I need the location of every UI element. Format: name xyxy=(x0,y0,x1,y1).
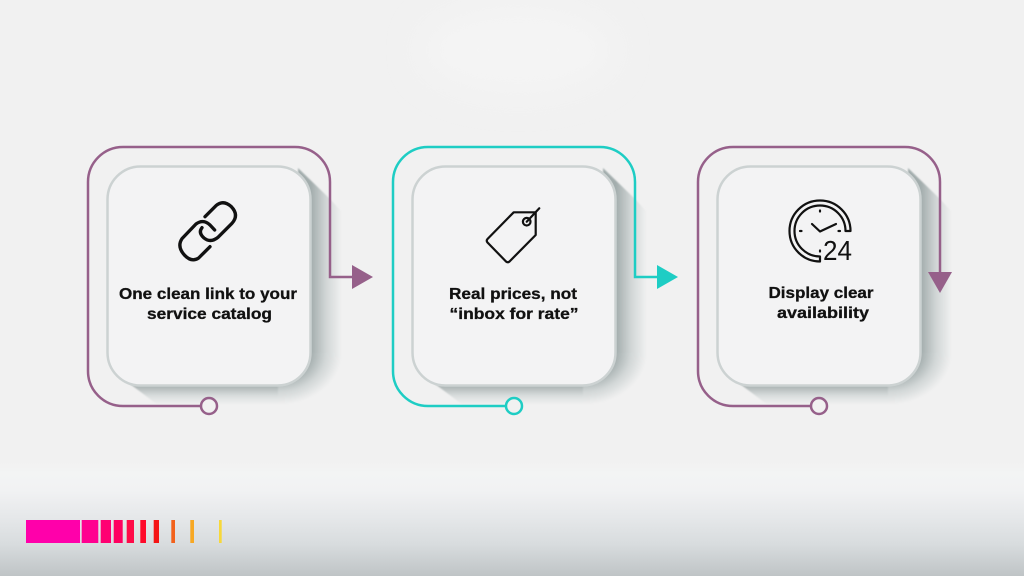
heading xyxy=(768,285,874,322)
arrow head xyxy=(352,265,373,289)
icon: 24 hour clock xyxy=(789,200,852,266)
faint top glow xyxy=(422,6,614,94)
heading xyxy=(449,286,578,323)
connector line xyxy=(393,147,659,406)
card shadow xyxy=(435,168,647,405)
panel: real prices xyxy=(393,147,678,414)
heading: Display clear xyxy=(768,285,874,302)
heading: availability xyxy=(777,305,869,322)
heading xyxy=(119,286,297,323)
bottom floor gradient xyxy=(0,462,1024,576)
ring node xyxy=(811,398,827,414)
heading: service catalog xyxy=(147,306,272,323)
panel: clear availability xyxy=(698,147,952,414)
heading: Real prices, not xyxy=(449,286,578,303)
panel: service catalog link xyxy=(88,147,373,414)
heading: One clean link to your xyxy=(119,286,297,303)
heading: “inbox for rate” xyxy=(450,306,578,323)
card shadow xyxy=(740,168,952,405)
card xyxy=(412,166,616,386)
icon: price tag xyxy=(487,208,539,262)
connector line xyxy=(698,147,940,406)
arrow head xyxy=(657,265,678,289)
progress bar decoration xyxy=(26,520,222,543)
card xyxy=(718,166,920,386)
icon: 24 hour clock: 24 xyxy=(823,235,852,266)
ring node xyxy=(201,398,217,414)
arrow head xyxy=(928,272,952,293)
connector line xyxy=(88,147,354,406)
card shadow xyxy=(130,168,342,405)
card xyxy=(108,166,310,386)
ring node xyxy=(506,398,522,414)
icon: chain link xyxy=(180,203,235,260)
